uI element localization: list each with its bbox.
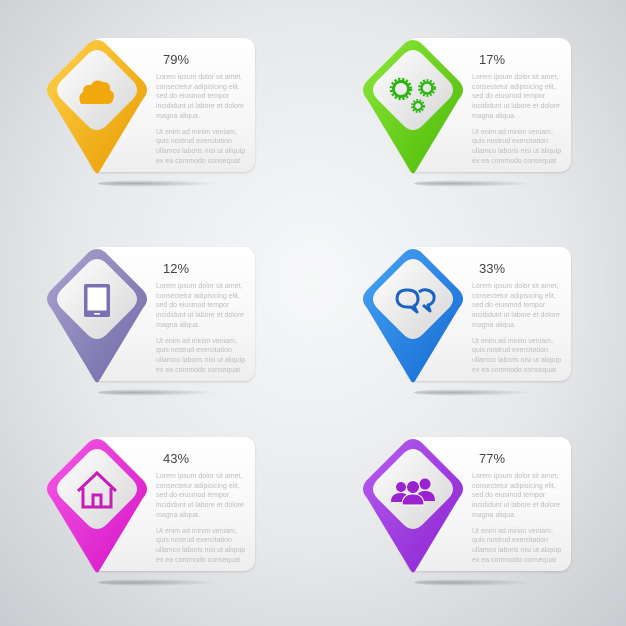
text block: Lorem ipsum dolor sit amet, [156,473,242,480]
text block: incididunt ut labore et dolore [156,312,244,319]
pin: purple people [363,439,463,572]
text block: ex ea commodo consequat [472,158,556,165]
item: tablet 12% [47,247,256,396]
text block: ullamco laboris nisi ut aliquip [156,148,245,155]
text block: magna aliqua. [472,512,516,519]
text block: Lorem ipsum dolor sit amet, [472,74,558,81]
text block: sed do eiusmod tempor [472,93,545,100]
text block: incididunt ut labore et dolore [156,502,244,509]
item: chat 33% [363,247,572,396]
text block: sed do eiusmod tempor [156,93,229,100]
item: people 77% [363,437,572,586]
text block: ex ea commodo consequat [472,557,556,564]
percentage: 12% [163,261,189,276]
text block [156,74,245,165]
text block: ullamco laboris nisi ut aliquip [156,357,245,364]
text block: Ut enim ad minim veniam, [472,338,553,345]
text block: Ut enim ad minim veniam, [156,129,237,136]
text block: ullamco laboris nisi ut aliquip [156,547,245,554]
percentage: 43% [163,451,189,466]
text block: quis nostrud exercitation [472,537,548,544]
text block: ex ea commodo consequat [156,367,240,374]
percentage: 33% [479,261,505,276]
text block: sed do eiusmod tempor [156,492,229,499]
text block [472,472,561,564]
text block: consectetur adipisicing elit, [156,84,240,91]
text block: sed do eiusmod tempor [156,302,229,309]
text block [472,282,561,374]
text block: Lorem ipsum dolor sit amet, [472,283,558,290]
text block: Ut enim ad minim veniam, [472,129,553,136]
pin: blue chat [363,249,463,382]
text block: magna aliqua. [156,512,200,519]
text block: quis nostrud exercitation [156,537,232,544]
text block: consectetur adipisicing elit, [472,483,556,490]
text block: incididunt ut labore et dolore [472,502,560,509]
text block: ullamco laboris nisi ut aliquip [472,357,561,364]
percentage: 79% [163,52,189,67]
text block: sed do eiusmod tempor [472,492,545,499]
text block: quis nostrud exercitation [472,347,548,354]
percentage: 17% [479,52,505,67]
text block: incididunt ut labore et dolore [472,103,560,110]
text block: magna aliqua. [472,113,516,120]
text block: sed do eiusmod tempor [472,302,545,309]
text block: ullamco laboris nisi ut aliquip [472,547,561,554]
pin: green gears [363,40,463,174]
text block: magna aliqua. [156,322,200,329]
text block: consectetur adipisicing elit, [472,84,556,91]
pin: yellow cloud [47,40,147,174]
item: home 43% [47,437,256,586]
text block: Ut enim ad minim veniam, [472,528,553,535]
pin: lavender tablet [47,249,147,382]
text block: Lorem ipsum dolor sit amet, [156,283,242,290]
text block: magna aliqua. [156,113,200,120]
text block: consectetur adipisicing elit, [156,293,240,300]
text block: ex ea commodo consequat [156,557,240,564]
text block: incididunt ut labore et dolore [156,103,244,110]
text block: quis nostrud exercitation [156,347,232,354]
text block: consectetur adipisicing elit, [156,483,240,490]
text block: ex ea commodo consequat [156,158,240,165]
text block [472,74,561,165]
text block: quis nostrud exercitation [472,138,548,145]
item: gears 17% [363,38,572,186]
text block: ex ea commodo consequat [472,367,556,374]
item: cloud 79% [47,38,256,186]
text block: quis nostrud exercitation [156,138,232,145]
text block: incididunt ut labore et dolore [472,312,560,319]
percentage: 77% [479,451,505,466]
text block: Lorem ipsum dolor sit amet, [156,74,242,81]
text block [156,282,245,374]
text block: magna aliqua. [472,322,516,329]
text block: consectetur adipisicing elit, [472,293,556,300]
text block: Lorem ipsum dolor sit amet, [472,473,558,480]
text block: ullamco laboris nisi ut aliquip [472,148,561,155]
text block: Ut enim ad minim veniam, [156,528,237,535]
pin: magenta home [47,439,147,572]
text block [156,472,245,564]
text block: Ut enim ad minim veniam, [156,338,237,345]
